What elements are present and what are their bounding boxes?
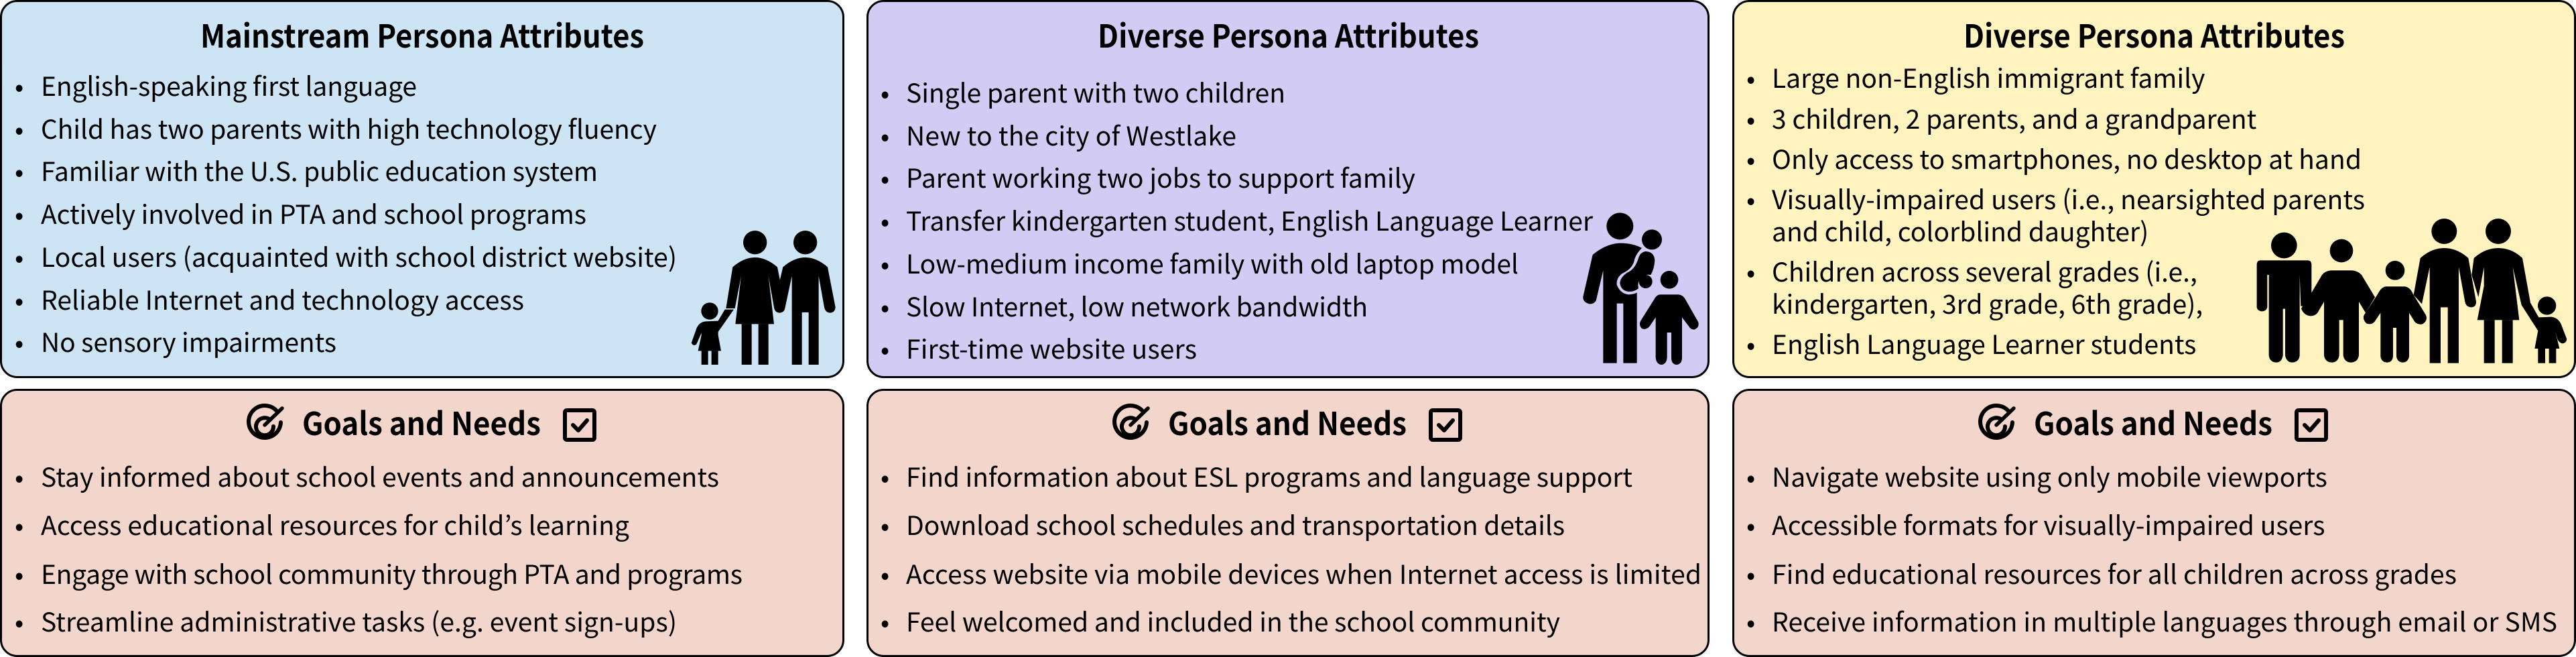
icon: parent with two children <box>1583 213 1699 365</box>
list: mainstream attributes: Local users (acquainted with school district website) <box>41 237 677 275</box>
list: large family attributes: English Language Learner students <box>1772 324 2196 362</box>
list: large family attributes: • <box>1746 58 1755 96</box>
icon: large family of six <box>2257 219 2567 363</box>
panel: diverse persona attributes, large family <box>1733 1 2575 377</box>
list: mainstream attributes: • <box>15 194 23 232</box>
icon: checkbox <box>1431 410 1460 440</box>
list: single parent attributes: Single parent with two children <box>906 73 1285 111</box>
list: mainstream goals: Engage with school community through PTA and programs <box>41 554 743 592</box>
icon: checkbox <box>565 410 594 440</box>
list: single parent goals: • <box>881 554 889 592</box>
list: large family attributes: • <box>1746 252 1755 290</box>
list: large family goals: Find educational resources for all children across grades <box>1772 554 2457 592</box>
list: large family goals <box>1746 457 2557 640</box>
list: mainstream attributes: English-speaking first language <box>41 66 417 104</box>
list: large family attributes: • <box>1746 99 1755 137</box>
list: large family attributes: Large non-English immigrant family <box>1772 58 2205 96</box>
list: single parent attributes: • <box>881 244 889 282</box>
list: single parent attributes: • <box>881 73 889 111</box>
list: single parent goals: • <box>881 602 889 640</box>
list: single parent attributes: Transfer kindergarten student, English Language Learner <box>906 201 1594 239</box>
list: large family attributes: Only access to smartphones, no desktop at hand <box>1772 139 2362 177</box>
list: single parent attributes: Slow Internet, low network bandwidth <box>906 287 1368 324</box>
list: large family goals: • <box>1746 457 1755 495</box>
list: single parent attributes: • <box>881 201 889 239</box>
list: large family goals: Receive information in multiple languages through email or SMS <box>1772 602 2557 640</box>
list: mainstream goals: • <box>15 457 23 495</box>
list: mainstream attributes: • <box>15 66 23 104</box>
panel: goals and needs, mainstream <box>1 390 843 656</box>
icon: target <box>1980 406 2014 438</box>
list: mainstream goals: • <box>15 602 23 640</box>
heading: goals and needs: Goals and Needs <box>2034 398 2272 444</box>
heading: mainstream persona attributes: Mainstream Persona Attributes <box>200 11 644 57</box>
list: mainstream goals: Stay informed about school events and announcements <box>41 457 719 495</box>
list: large family attributes: kindergarten, 3rd grade, 6th grade), <box>1772 284 2203 322</box>
heading: goals and needs: Goals and Needs <box>302 398 541 444</box>
list: single parent attributes: • <box>881 158 889 196</box>
list: large family attributes: and child, colorblind daughter) <box>1772 212 2148 249</box>
list: single parent attributes: Parent working two jobs to support family <box>906 158 1415 196</box>
list: single parent goals: • <box>881 505 889 543</box>
list: mainstream attributes: Actively involved in PTA and school programs <box>41 194 586 232</box>
list: single parent attributes: • <box>881 116 889 154</box>
list: mainstream goals: Streamline administrative tasks (e.g. event sign-ups) <box>41 602 677 640</box>
icon: target <box>249 406 282 438</box>
heading: diverse persona attributes: Diverse Persona Attributes <box>1963 11 2345 57</box>
list: single parent goals: Access website via mobile devices when Internet access is limited <box>906 554 1701 592</box>
icon: checkbox <box>2297 410 2326 440</box>
list: mainstream attributes: • <box>15 109 23 147</box>
list: single parent attributes: Low-medium income family with old laptop model <box>906 244 1519 282</box>
list: single parent goals: Download school schedules and transportation details <box>906 505 1565 543</box>
icon: family of three <box>692 231 836 365</box>
list: mainstream goals <box>15 457 743 640</box>
list: single parent attributes: • <box>881 329 889 367</box>
list: single parent goals: Feel welcomed and included in the school community <box>906 602 1560 640</box>
list: mainstream attributes: • <box>15 280 23 318</box>
list: mainstream attributes: Familiar with the U.S. public education system <box>41 152 598 189</box>
list: large family goals: • <box>1746 505 1755 543</box>
list: large family goals: • <box>1746 554 1755 592</box>
heading: goals and needs: Goals and Needs <box>1168 398 1407 444</box>
list: mainstream goals: Access educational resources for child’s learning <box>41 505 629 543</box>
panel: diverse persona attributes, single parent <box>867 1 1709 377</box>
list: mainstream attributes: • <box>15 322 23 360</box>
list: single parent goals: • <box>881 457 889 495</box>
list: large family attributes: • <box>1746 180 1755 217</box>
list: large family attributes: • <box>1746 139 1755 177</box>
list: mainstream attributes: • <box>15 237 23 275</box>
list: single parent attributes: First-time website users <box>906 329 1197 367</box>
list: mainstream attributes: Child has two parents with high technology fluency <box>41 109 657 147</box>
heading: diverse persona attributes: Diverse Persona Attributes <box>1098 11 1479 57</box>
list: single parent attributes: New to the city of Westlake <box>906 116 1236 154</box>
list: large family attributes: Visually-impaired users (i.e., nearsighted parents <box>1772 180 2365 217</box>
panel: mainstream persona attributes <box>1 1 843 377</box>
list: mainstream attributes: Reliable Internet and technology access <box>41 280 524 318</box>
panel: goals and needs, single parent <box>867 390 1709 656</box>
list: large family goals: Accessible formats for visually-impaired users <box>1772 505 2325 543</box>
list: large family attributes <box>1746 58 2365 362</box>
list: single parent goals <box>881 457 1701 640</box>
list: large family attributes: Children across several grades (i.e., <box>1772 252 2197 290</box>
list: large family attributes: 3 children, 2 parents, and a grandparent <box>1772 99 2257 137</box>
list: mainstream attributes: • <box>15 152 23 189</box>
list: mainstream goals: • <box>15 554 23 592</box>
list: single parent goals: Find information about ESL programs and language support <box>906 457 1632 495</box>
panel: goals and needs, large family <box>1733 390 2575 656</box>
list: mainstream goals: • <box>15 505 23 543</box>
list: single parent attributes <box>881 73 1594 367</box>
list: single parent attributes: • <box>881 287 889 324</box>
icon: target <box>1114 406 1148 438</box>
list: large family attributes: • <box>1746 324 1755 362</box>
list: large family goals: • <box>1746 602 1755 640</box>
list: large family goals: Navigate website using only mobile viewports <box>1772 457 2327 495</box>
list: mainstream attributes <box>15 66 677 360</box>
list: mainstream attributes: No sensory impairments <box>41 322 336 360</box>
